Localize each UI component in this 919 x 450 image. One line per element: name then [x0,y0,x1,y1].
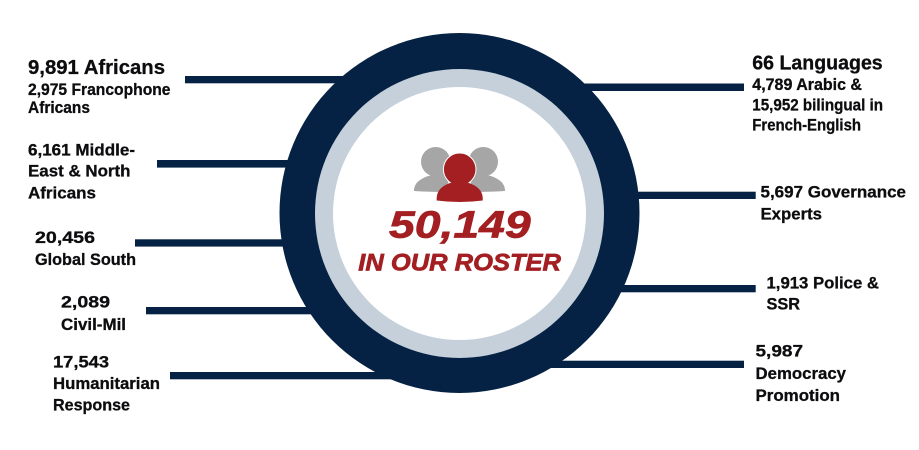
label: Humanitarian Response: Response [53,397,130,415]
label: Governance Experts: Experts [760,205,822,223]
label: Democracy Promotion: 5,987 [756,343,803,361]
label: Global South: 20,456 [35,229,95,247]
label: Democracy Promotion [756,343,847,405]
label: Africans: 2,975 Francophone [28,81,170,99]
label: Middle-East and North Africans: 6,161 Middle- [28,142,135,160]
label: Languages: 4,789 Arabic & [752,76,862,94]
label: Police and SSR: 1,913 Police & [766,274,879,292]
total caption: IN OUR ROSTER [358,250,562,277]
label: Languages [752,52,883,135]
label: Africans: 9,891 Africans [28,57,165,79]
label: Africans [28,57,170,117]
label: Languages: 15,952 bilingual in [752,97,883,115]
label: Languages: 66 Languages [752,52,883,74]
label: Humanitarian Response: Humanitarian [53,375,160,393]
total figure: 50,149 [389,204,531,246]
label: Middle-East and North Africans [28,142,135,203]
label: Languages: French-English [752,117,861,135]
icon: people group [414,147,505,202]
label: Humanitarian Response: 17,543 [53,353,109,371]
label: Civil-Mil: Civil-Mil [61,316,126,334]
label: Humanitarian Response [53,353,160,415]
label: Democracy Promotion: Promotion [756,387,840,405]
label: Police and SSR [766,274,879,313]
label: Civil-Mil [61,294,126,334]
central circle [280,33,640,393]
label: Police and SSR: SSR [766,295,800,313]
label: Global South [35,229,136,269]
label: Middle-East and North Africans: East & North [28,163,130,181]
label: Global South: Global South [35,251,136,269]
label: Africans: Africans [28,99,90,117]
label: Middle-East and North Africans: Africans [28,185,96,203]
label: Governance Experts: 5,697 Governance [760,183,906,201]
label: Democracy Promotion: Democracy [756,365,847,383]
label: Civil-Mil: 2,089 [61,294,110,312]
connector lines [135,76,756,379]
label: Governance Experts [760,183,906,223]
